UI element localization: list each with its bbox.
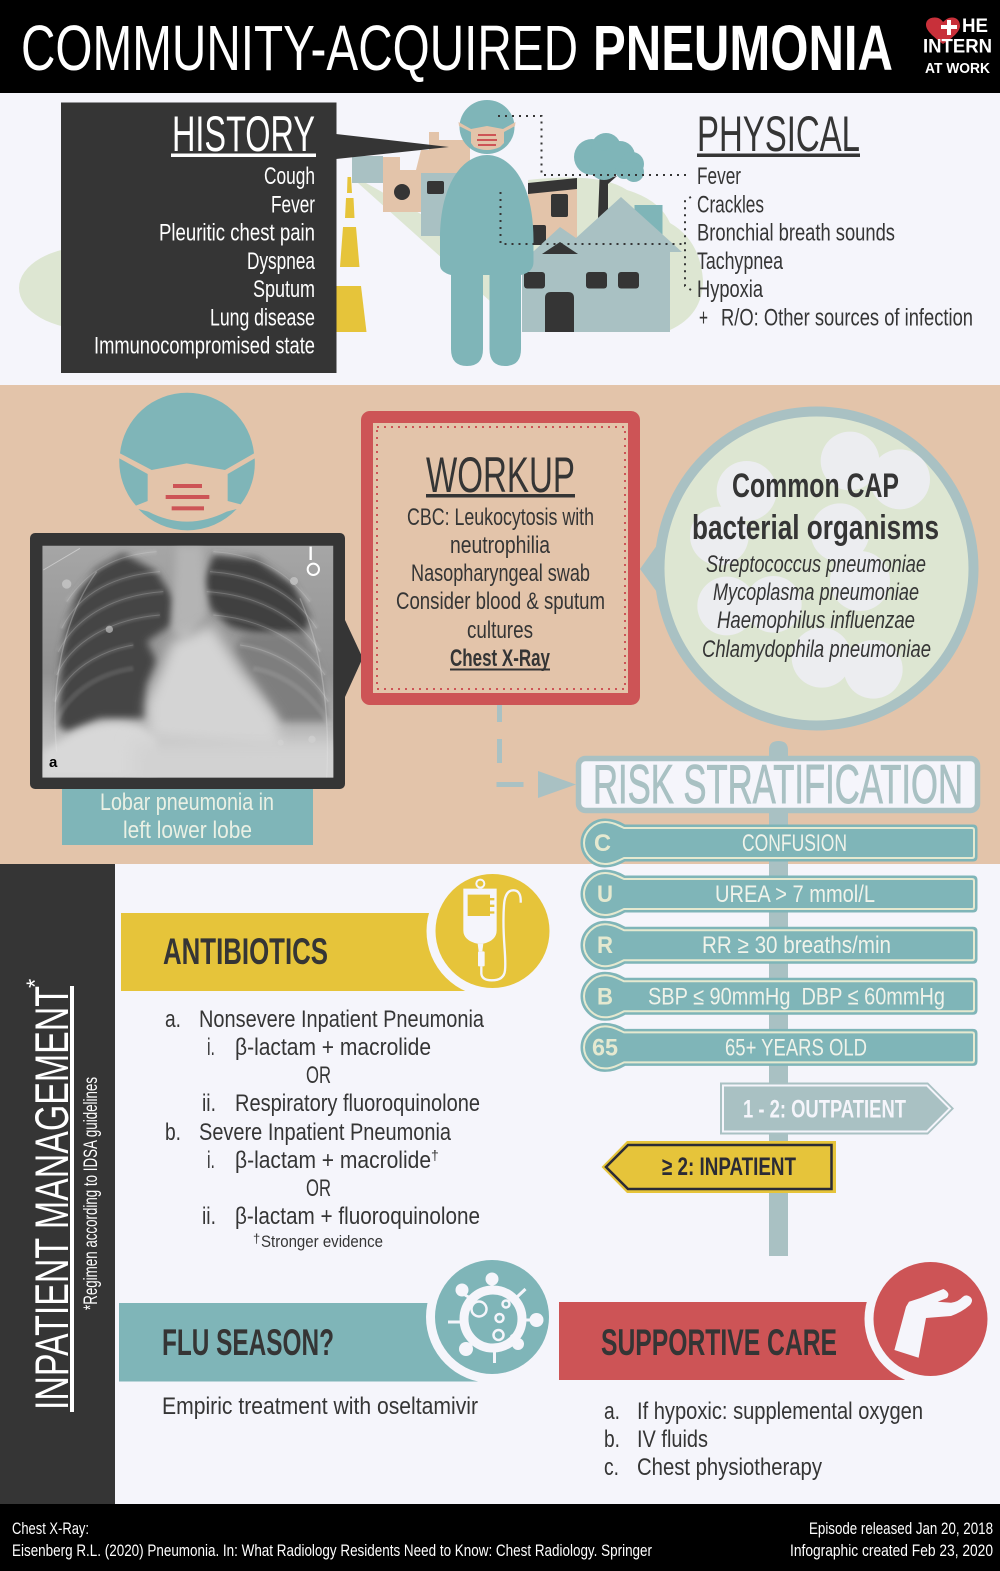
text block: supportive care: Chest physiotherapy bbox=[637, 1454, 822, 1481]
panel: flu season banner: FLU SEASON? bbox=[162, 1322, 334, 1363]
logo: The Intern at Work: HE bbox=[962, 16, 988, 37]
sign: B blood pressure bbox=[581, 972, 977, 1020]
heading: organisms bbox=[692, 467, 939, 547]
sign: B blood pressure: B bbox=[597, 983, 613, 1010]
peach band bbox=[0, 385, 1000, 864]
sign: C confusion: CONFUSION bbox=[742, 830, 847, 857]
sign: B blood pressure: SBP ≤ 90mmHg DBP ≤ 60mmHg bbox=[648, 983, 945, 1010]
panel: supportive care banner: SUPPORTIVE CARE bbox=[601, 1322, 837, 1363]
text block: antibiotics regimen: β-lactam + macrolide bbox=[235, 1034, 431, 1061]
logo: The Intern at Work bbox=[923, 16, 992, 77]
heading: history bbox=[171, 106, 316, 162]
text block: physical list: Tachypnea bbox=[697, 248, 783, 275]
heading: physical bbox=[697, 106, 860, 162]
panel: supportive care banner bbox=[559, 1253, 996, 1385]
text block: physical list: Crackles bbox=[697, 192, 764, 218]
text block: flu season: Empiric treatment with oseltamivir bbox=[162, 1393, 478, 1420]
sign: 65 age bbox=[581, 1023, 977, 1071]
panel: common CAP organisms bbox=[640, 412, 974, 726]
text block: workup list: CBC: Leukocytosis with bbox=[407, 504, 594, 531]
text block: physical list: Bronchial breath sounds bbox=[697, 220, 895, 246]
text block: antibiotics regimen: OR bbox=[306, 1062, 331, 1089]
panel: inpatient management sidebar bbox=[0, 864, 115, 1504]
arrow: x-ray to workup bbox=[345, 620, 363, 697]
heading: physical: PHYSICAL bbox=[697, 106, 860, 162]
sign: U urea: U bbox=[597, 881, 613, 908]
text block: workup list: Chest X-Ray bbox=[450, 645, 550, 672]
sign: C confusion bbox=[581, 819, 977, 867]
text block: organism list bbox=[702, 551, 931, 663]
text block: supportive care: IV fluids bbox=[637, 1426, 708, 1453]
sign: R respiratory rate: RR ≥ 30 breaths/min bbox=[702, 932, 891, 959]
text block: antibiotics regimen: Stronger evidence bbox=[261, 1232, 383, 1251]
panel: workup bbox=[367, 417, 634, 699]
text block: supportive care: b. bbox=[604, 1426, 620, 1453]
caption: lobar pneumonia: left lower lobe bbox=[123, 817, 252, 844]
chest x-ray image bbox=[30, 533, 347, 792]
text block: workup list: neutrophilia bbox=[450, 532, 551, 559]
panel: physical bbox=[697, 106, 973, 332]
sign post bbox=[769, 741, 788, 1256]
text block: physical list bbox=[697, 163, 973, 332]
text block: history list bbox=[94, 163, 315, 360]
heading: workup: WORKUP bbox=[426, 447, 575, 503]
footer: Eisenberg R.L. (2020) Pneumonia. In: What Radiology Residents Need to Know: Chest Radiology. Springer bbox=[12, 1541, 652, 1560]
sign: 65 age: 65+ YEARS OLD bbox=[725, 1034, 867, 1061]
text block: antibiotics regimen: Severe Inpatient Pneumonia bbox=[199, 1119, 452, 1146]
signpost: risk stratification bbox=[578, 741, 978, 1256]
footer bbox=[0, 1504, 1000, 1571]
icon: open hand bbox=[894, 1289, 972, 1358]
text block: supportive care bbox=[604, 1398, 923, 1481]
text block: antibiotics regimen: ii. bbox=[202, 1203, 216, 1230]
sign: inpatient bbox=[602, 1141, 836, 1193]
sign: U urea bbox=[581, 870, 977, 918]
panel: inpatient management sidebar: *Regimen according to IDSA guidelines bbox=[81, 1077, 102, 1310]
text block: workup list: Consider blood & sputum bbox=[396, 588, 605, 615]
text block: antibiotics regimen: ii. bbox=[202, 1090, 216, 1117]
text block: antibiotics regimen bbox=[165, 1006, 485, 1251]
text block: antibiotics regimen: β-lactam + fluoroquinolone bbox=[235, 1203, 480, 1230]
logo: The Intern at Work: AT WORK bbox=[925, 61, 990, 77]
sign: R respiratory rate: R bbox=[597, 932, 613, 959]
footer: Chest X-Ray: bbox=[12, 1519, 89, 1538]
text block: workup list: cultures bbox=[467, 617, 533, 644]
text block: antibiotics regimen: b. bbox=[165, 1119, 181, 1146]
text block: organism list: Streptococcus pneumoniae bbox=[706, 551, 926, 578]
panel: inpatient management sidebar: INPATIENT MANAGEMENT bbox=[25, 986, 78, 1410]
sign: outpatient: 1 - 2: OUTPATIENT bbox=[743, 1096, 906, 1124]
text block: history list: Dyspnea bbox=[247, 248, 315, 275]
caption: lobar pneumonia bbox=[62, 789, 313, 845]
text block: antibiotics regimen: † bbox=[431, 1147, 439, 1163]
sign: inpatient: ≥ 2: INPATIENT bbox=[662, 1153, 796, 1181]
arrow: dashed workup to risk stratification bbox=[496, 705, 576, 798]
text block: antibiotics regimen: i. bbox=[207, 1147, 215, 1174]
illustration: village background bbox=[19, 132, 703, 332]
panel: antibiotics banner bbox=[121, 865, 558, 997]
dotted connectors from doctor to physical findings bbox=[498, 116, 691, 290]
panel: inpatient management sidebar: * bbox=[22, 979, 49, 988]
text block: workup list bbox=[396, 504, 605, 672]
heading: history: HISTORY bbox=[172, 106, 315, 162]
text block: organism list: Mycoplasma pneumoniae bbox=[713, 579, 919, 606]
sign: C confusion: C bbox=[594, 830, 611, 857]
text block: organism list: Chlamydophila pneumoniae bbox=[702, 636, 931, 663]
title bar bbox=[0, 0, 1000, 93]
title bar: COMMUNITY-ACQUIRED bbox=[21, 12, 578, 84]
panel: antibiotics banner: ANTIBIOTICS bbox=[163, 931, 328, 972]
text block: history list: Pleuritic chest pain bbox=[159, 220, 315, 246]
sign: 65 age: 65 bbox=[592, 1034, 618, 1061]
text block: history list: Sputum bbox=[253, 276, 315, 303]
text block: physical list: Fever bbox=[697, 163, 741, 190]
text block: history list: Lung disease bbox=[210, 304, 315, 332]
text block: antibiotics regimen: Nonsevere Inpatient Pneumonia bbox=[199, 1006, 485, 1033]
text block: workup list: Nasopharyngeal swab bbox=[411, 560, 590, 587]
title bar: PNEUMONIA bbox=[593, 12, 893, 84]
text block: antibiotics regimen: OR bbox=[306, 1175, 331, 1202]
panel: flu season banner bbox=[119, 1251, 558, 1383]
text block: history list: Fever bbox=[271, 192, 315, 218]
heading: workup bbox=[426, 447, 575, 503]
text block: history list: Immunocompromised state bbox=[94, 332, 315, 360]
text block: physical list: + bbox=[699, 304, 708, 332]
heading: organisms: Common CAP bbox=[732, 467, 899, 505]
text block: antibiotics regimen: Respiratory fluoroquinolone bbox=[235, 1090, 480, 1117]
text block: supportive care: c. bbox=[604, 1454, 619, 1481]
icon: doctor figure with mask bbox=[440, 100, 534, 366]
icon: IV bag bbox=[463, 880, 521, 980]
sign: U urea: UREA > 7 mmol/L bbox=[715, 881, 875, 908]
caption: lobar pneumonia: Lobar pneumonia in bbox=[100, 789, 274, 816]
icon: masked face bbox=[119, 393, 255, 530]
text block: antibiotics regimen: † bbox=[253, 1231, 260, 1246]
chest x-ray image: a bbox=[49, 754, 58, 771]
sign: R respiratory rate bbox=[581, 921, 977, 969]
panel: history bbox=[61, 102, 449, 373]
text block: physical list: Hypoxia bbox=[697, 276, 763, 303]
text block: antibiotics regimen: a. bbox=[165, 1006, 181, 1033]
text block: antibiotics regimen: β-lactam + macrolide bbox=[235, 1147, 431, 1174]
text block: history list: Cough bbox=[264, 163, 315, 190]
text block: supportive care: If hypoxic: supplemental oxygen bbox=[637, 1398, 923, 1425]
text block: organism list: Haemophilus influenzae bbox=[717, 607, 915, 634]
sign: outpatient bbox=[720, 1082, 954, 1134]
text block: antibiotics regimen: i. bbox=[207, 1034, 215, 1061]
icon: virus bbox=[448, 1272, 544, 1363]
logo: The Intern at Work: INTERN bbox=[923, 36, 992, 58]
text block: supportive care: a. bbox=[604, 1398, 620, 1425]
